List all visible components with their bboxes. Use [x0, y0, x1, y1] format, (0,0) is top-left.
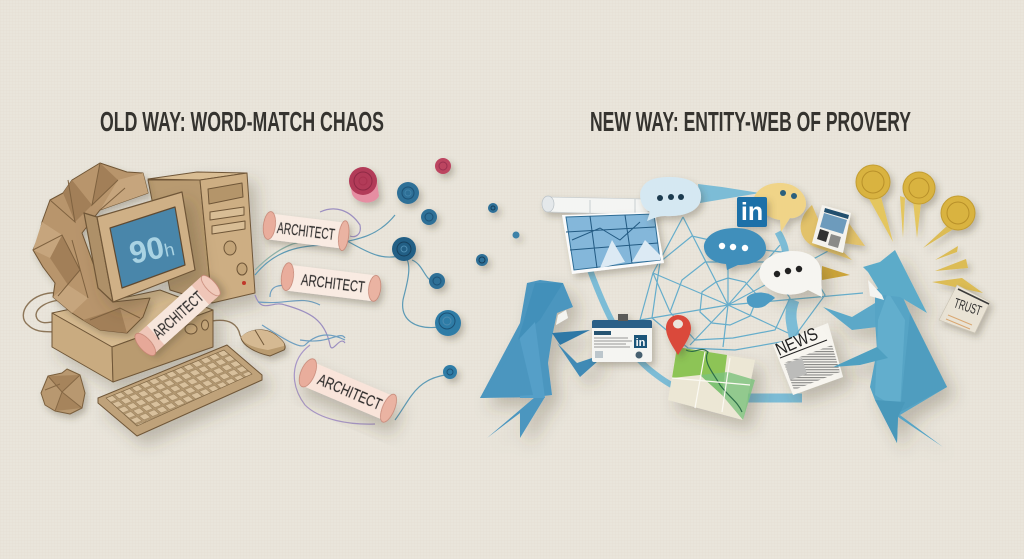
spider web — [640, 217, 863, 350]
scroll: architect on computer: ARCHITECT — [150, 288, 208, 343]
speech bubble: light blue — [640, 177, 701, 221]
folded map — [668, 347, 755, 420]
small blue leaf bubble — [747, 293, 775, 308]
base case — [52, 290, 213, 382]
monitor — [84, 192, 195, 302]
scroll: architect middle — [280, 262, 382, 302]
news headline: NEWS — [772, 323, 821, 360]
gold rays — [932, 246, 983, 293]
id badge: in — [636, 337, 646, 349]
gold folded paper behind news — [801, 205, 865, 260]
blueprint map — [562, 212, 664, 274]
scroll: architect top: ARCHITECT — [276, 220, 336, 244]
trust label: TRUST — [952, 295, 984, 319]
badge linkedin mark — [634, 335, 647, 348]
scroll: architect top — [261, 211, 351, 251]
ring band top — [698, 184, 760, 203]
speech bubble: mid blue — [704, 228, 766, 270]
crumpled paper — [33, 163, 150, 333]
mouse — [241, 330, 285, 356]
cables — [23, 293, 250, 339]
speech bubble: white — [759, 251, 822, 297]
keyboard — [98, 345, 262, 436]
tangled wires — [255, 209, 445, 424]
origami figure: right — [823, 250, 947, 447]
monitor screen — [110, 207, 185, 288]
panel: old way computer and scrolls — [23, 158, 520, 436]
scroll: architect bottom: ARCHITECT — [315, 372, 384, 414]
screen text: 90h — [126, 227, 177, 271]
icon: linkedin: in — [741, 198, 763, 226]
blueprint roll — [542, 196, 648, 215]
computer tower — [148, 172, 255, 303]
ring band around web — [590, 232, 802, 398]
small newspaper — [812, 205, 851, 253]
trust card — [939, 285, 990, 333]
scroll: architect bottom — [295, 356, 400, 424]
small gold spike — [822, 266, 850, 280]
scroll: architect on computer — [131, 272, 224, 359]
panel: new way entity web — [480, 165, 990, 447]
paper spirals — [349, 158, 520, 379]
gold seals with spikes — [856, 165, 975, 248]
origami figure: left — [480, 280, 607, 438]
icon: location pin — [666, 315, 691, 355]
id badge — [592, 314, 652, 362]
crumpled ball — [41, 369, 85, 414]
scroll: architect middle: ARCHITECT — [300, 272, 366, 297]
speech bubble: yellow — [754, 183, 806, 232]
heading: old way: OLD WAY: WORD-MATCH CHAOS — [100, 106, 384, 137]
newspaper news — [772, 323, 843, 395]
icon: linkedin — [737, 197, 767, 227]
